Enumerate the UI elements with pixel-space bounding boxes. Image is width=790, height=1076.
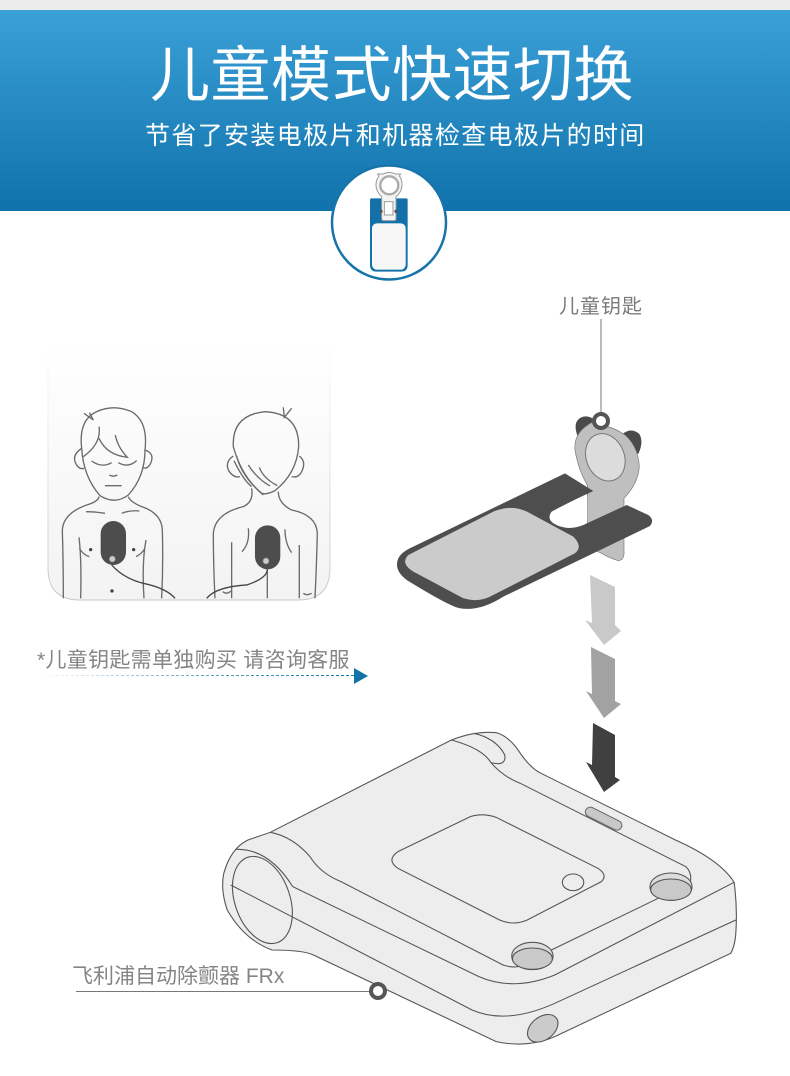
- arrow: dark: [586, 723, 620, 792]
- icon: child key badge: [332, 166, 446, 280]
- title: 儿童模式快速切换: [150, 42, 634, 109]
- child key and electrode pad: [397, 416, 652, 609]
- AED device: [222, 732, 736, 1048]
- electrode pad base: [397, 473, 652, 609]
- label: child key: 儿童钥匙: [559, 296, 643, 318]
- label: device: 飞利浦自动除颤器 FRx: [72, 965, 284, 988]
- subtitle: 节省了安装电极片和机器检查电极片的时间: [145, 122, 646, 150]
- arrow: light: [585, 575, 621, 645]
- front-view child: [62, 408, 175, 598]
- key ears: [576, 416, 641, 454]
- label leader: FRx: [76, 984, 385, 998]
- back-view child: [207, 407, 317, 598]
- header banner: [0, 0, 790, 211]
- note: purchase: *儿童钥匙需单独购买 请咨询客服: [37, 649, 350, 672]
- dashed note line with arrow: [36, 668, 368, 684]
- battery panel: [392, 815, 604, 923]
- electrode gel: [405, 508, 579, 600]
- slot: [590, 812, 617, 825]
- feet: [512, 942, 553, 970]
- key shaft over pad: [587, 497, 623, 522]
- arrow: medium: [586, 647, 621, 718]
- key body: [575, 422, 639, 561]
- panel: child electrode placement: [48, 340, 330, 600]
- label leader: child key: [594, 319, 608, 428]
